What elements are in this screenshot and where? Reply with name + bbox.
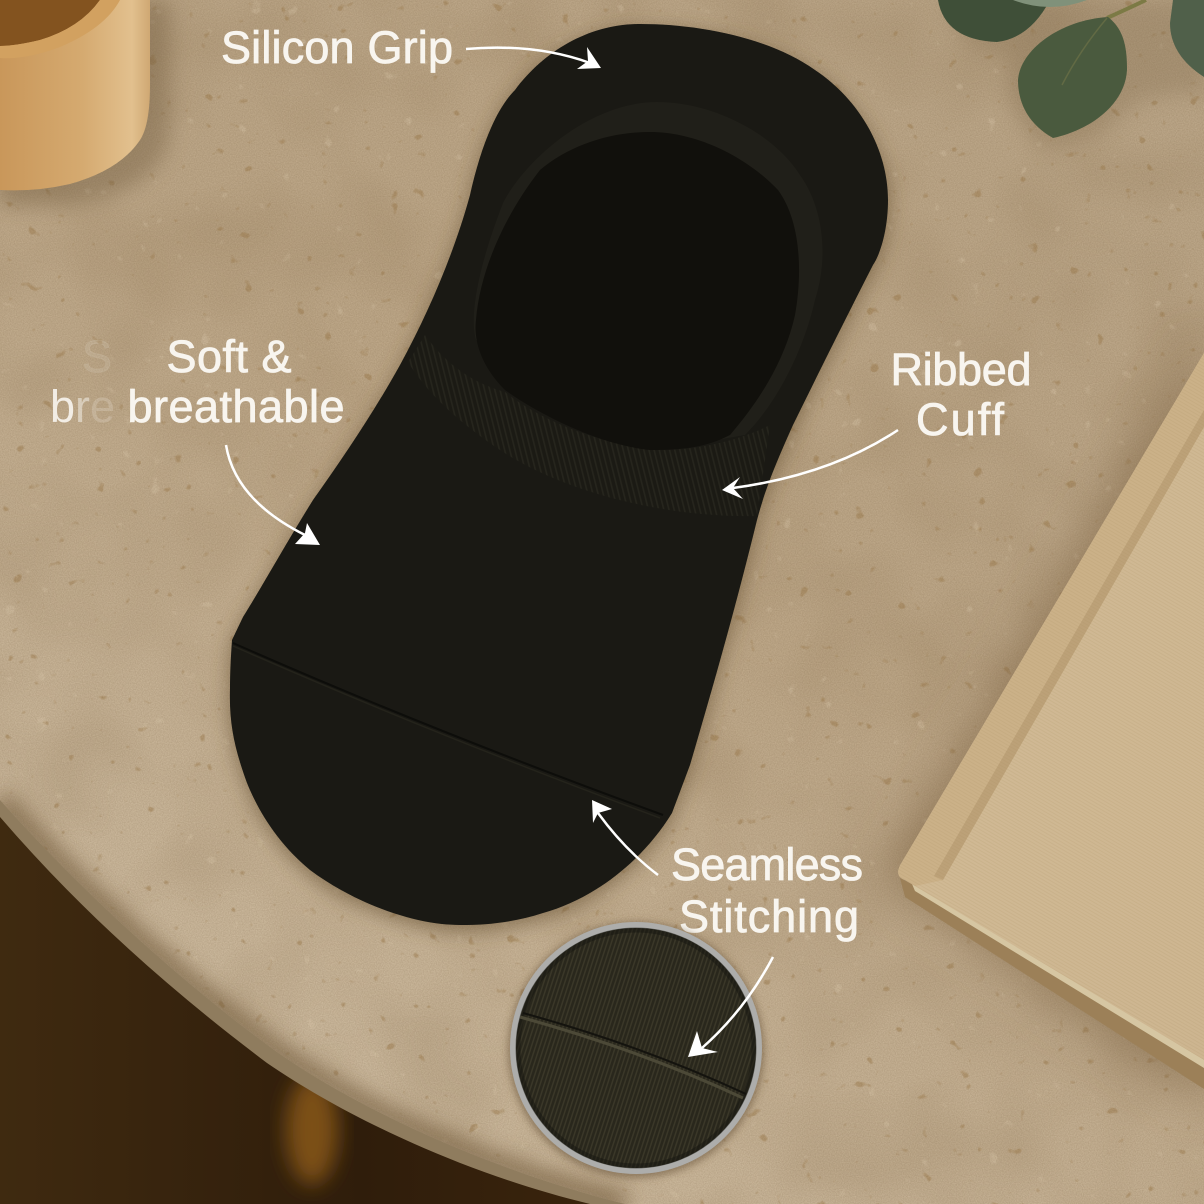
label: seamless stitching: Seamless: [671, 839, 863, 890]
detail magnifier circle: [508, 922, 773, 1178]
label: silicon grip: Silicon Grip: [221, 22, 453, 73]
sock opening: [476, 132, 799, 450]
label: ribbed cuff: Cuff: [916, 394, 1004, 445]
arrow: silicon grip: [466, 47, 601, 69]
arrow: detail: [688, 957, 773, 1057]
label: seamless stitching: Stitching: [679, 891, 859, 942]
label: soft and breathable: breathable: [128, 381, 344, 432]
faded ghost label: bre: [50, 381, 115, 432]
leaf: pale top: [1013, 0, 1087, 7]
leaf: top left: [938, 0, 1050, 42]
wooden cup: [0, 0, 150, 190]
notebook page edge: [912, 884, 1204, 1068]
sock opening rim: [474, 102, 823, 450]
label: soft and breathable: [128, 331, 344, 545]
no-show sock: [230, 24, 888, 925]
label: seamless stitching: [592, 800, 863, 942]
label: ribbed cuff: Ribbed: [890, 344, 1032, 395]
arrow: seamless stitching: [592, 800, 658, 875]
faded ghost label: S: [82, 331, 112, 382]
label: soft and breathable: Soft &: [166, 331, 292, 382]
arrow: soft and breathable: [226, 445, 320, 545]
cup rim: [0, 0, 120, 58]
table rim: [0, 780, 700, 1204]
faded ghost label: [50, 331, 115, 432]
ribbed cuff: [410, 336, 769, 516]
notebook cover: [898, 353, 1204, 1060]
label: silicon grip: [221, 22, 601, 73]
arrow: ribbed cuff: [722, 430, 898, 499]
cup interior: [0, 0, 100, 46]
notebook lower cover: [900, 878, 1204, 1089]
leaf: right: [1170, 0, 1204, 77]
leaf: large: [1018, 17, 1127, 138]
label: ribbed cuff: [722, 344, 1032, 499]
notebook: [898, 353, 1204, 1089]
magnified seam: [520, 1013, 746, 1098]
eucalyptus leaves: [938, 0, 1204, 138]
toe seam: [233, 643, 663, 818]
